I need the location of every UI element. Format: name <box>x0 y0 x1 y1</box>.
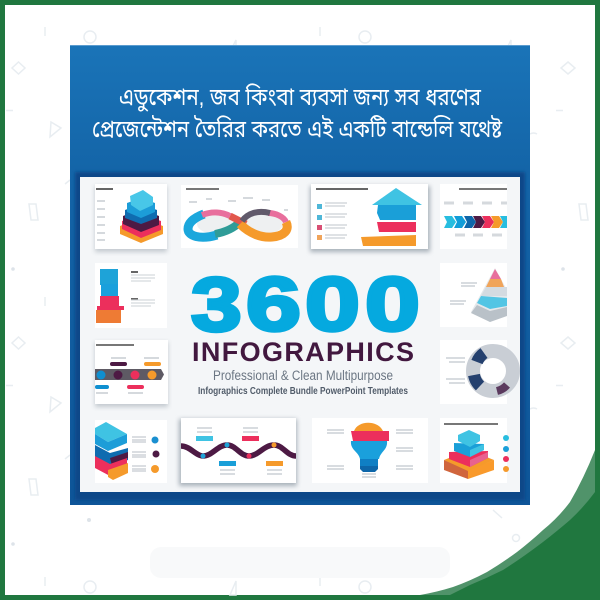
thumbnail: pyramid <box>440 263 507 327</box>
title: INFOGRAPHICS: INFOGRAPHICS <box>192 337 414 367</box>
thumbnail: stacked puzzle <box>95 263 167 328</box>
thumbnail: stages timeline <box>95 340 168 407</box>
blue panel <box>70 45 530 505</box>
subtitle: Professional & Clean Multipurpose <box>213 368 393 383</box>
heading: প্রেজেন্টেশন তৈরির করতে এই একটি বান্ডেলি যথেষ্ট <box>92 115 502 143</box>
title: 3600: 0 <box>365 262 420 347</box>
thumbnail: horizontal timeline <box>440 184 507 249</box>
thumbnail: layered tower <box>95 184 167 252</box>
thumbnail: gears <box>440 340 513 404</box>
title: 3600: 6 <box>246 262 301 347</box>
title: 3600: 0 <box>305 262 360 347</box>
thumbnail: winding road timeline <box>179 418 297 486</box>
title: 3600: 3 <box>191 262 242 347</box>
heading: এডুকেশন, জব কিংবা ব্যবসা জন্য সব ধরণের <box>119 83 482 112</box>
thumbnail: 3D block pyramid <box>440 418 509 483</box>
thumbnail: light bulb <box>312 418 428 483</box>
thumbnail: arrow steps <box>310 184 430 252</box>
white inner panel <box>80 177 520 492</box>
title: 3600 <box>191 262 420 347</box>
heading <box>92 83 502 143</box>
thumbnail: stacked blocks <box>95 420 167 483</box>
tagline: Infographics Complete Bundle PowerPoint Templates <box>198 385 408 397</box>
faint pill below the panel <box>150 547 450 578</box>
thumbnail: customer journey <box>181 185 298 248</box>
